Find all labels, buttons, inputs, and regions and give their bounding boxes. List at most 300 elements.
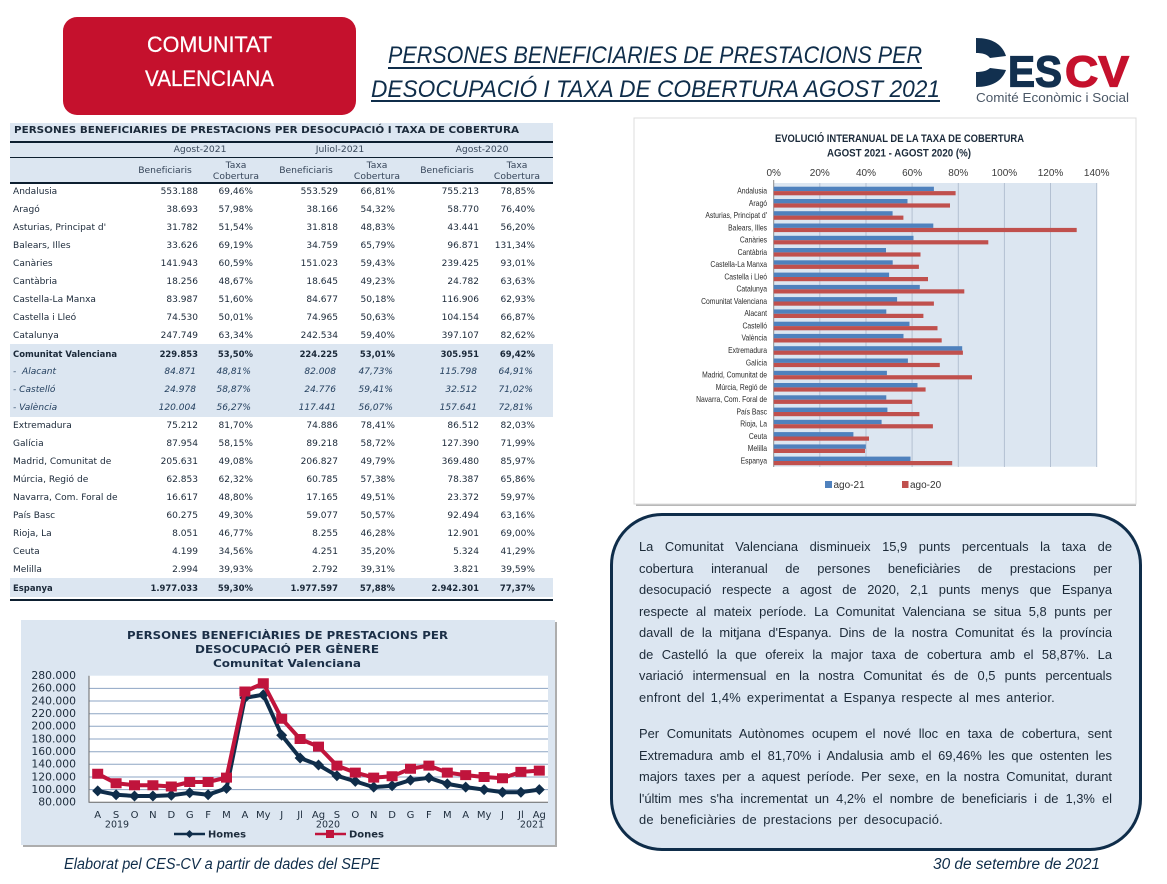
table rows: 46,28% [360,529,395,539]
series: ago-21 bars [774,187,962,461]
table rows: 49,30% [218,511,253,521]
category labels: Castelló [742,321,767,331]
y axis labels: 280.000 [31,669,76,682]
table rows: Asturias, Principat d' [13,223,106,233]
period header: Juliol-2021: Juliol-2021 [316,144,364,155]
legend: ago-20 [910,480,942,491]
table rows: Andalusia [13,187,57,197]
x axis labels: Jl [517,810,524,821]
category labels: València [741,333,768,343]
table rows: 229.853 [160,349,198,359]
table rows: 71,02% [498,385,533,395]
table rows: 50,18% [360,295,395,305]
table rows: 24.782 [447,277,479,287]
table rows: 116.906 [442,295,479,305]
table rows: 60,59% [218,259,253,269]
panel: data table [10,123,553,601]
table rows: 75.212 [166,421,198,431]
table rows: 39,93% [218,565,253,575]
text block: first paragraph [639,539,1112,704]
column header: Cobertura [354,171,400,182]
text block: second paragraph: majors taxes per a aquest període. Per sexe, en la nostra Comunitat, durant [639,769,1112,784]
table rows: 82,62% [500,331,535,341]
table rows: 63,34% [218,331,253,341]
x axis labels: M [222,810,231,821]
table rows: Madrid, Comunitat de [13,457,111,467]
table rows: Melilla [13,565,42,575]
x axis labels: F [205,810,211,821]
y axis labels: 140.000 [31,758,76,771]
top axis labels: 20% [810,168,830,179]
table rows: 59,40% [360,331,395,341]
category labels: Galícia [746,358,768,367]
x axis labels: J [500,810,504,821]
top axis labels: 140% [1084,168,1110,179]
table rows: 2.942.301 [431,583,479,593]
table rows: 56,20% [500,223,535,233]
text block: first paragraph: La Comunitat Valenciana disminueix 15,9 punts percentuals la taxa de [639,539,1112,554]
table rows: 206.827 [301,457,338,467]
table rows: 65,79% [360,241,395,251]
table rows: - València [13,403,57,413]
x axis labels: Ag [312,810,325,821]
table rows: 12.901 [447,529,479,539]
table rows: 205.631 [161,457,198,467]
table rows: 50,01% [218,313,253,323]
text block: first paragraph: respecte al mateix període. La Comunitat Valenciana se situa 5,8 punts per [639,604,1112,618]
table rows: 1.977.033 [150,583,198,593]
x axis labels: A [94,810,101,821]
column header: Cobertura [213,171,259,182]
top axis labels: 120% [1038,168,1063,179]
x axis labels: N [149,810,157,821]
table rows: 89.218 [306,439,338,449]
table rows: 62.853 [166,475,198,485]
table rows: Cantàbria [13,277,57,287]
table rows: 62,32% [218,475,253,485]
column header: Beneficiaris [420,165,474,176]
y axis labels: 80.000 [38,796,76,809]
x axis labels: J [279,810,283,821]
table rows: 18.645 [306,277,338,287]
column header [354,160,400,182]
category labels: Madrid, Comunitat de [702,370,767,380]
table rows: 58,15% [218,439,253,449]
panel: commentary text [610,513,1142,851]
category labels [696,186,768,466]
table rows: 49,23% [360,277,395,287]
table rows: 50,57% [360,511,395,521]
title [371,42,940,103]
table rows [13,187,535,593]
plot area and grid [89,676,548,802]
table rows: 2.792 [312,565,338,575]
table rows: Balears, Illes [13,241,71,251]
table rows: 86.512 [447,421,479,431]
table rows: 755.213 [442,187,479,197]
table rows: 5.324 [453,547,479,557]
x axis labels: O [351,810,359,821]
y axis labels: 160.000 [31,745,76,758]
table rows: 242.534 [301,331,338,341]
category labels: Rioja, La [740,419,768,429]
top axis labels: 100% [992,168,1017,179]
period header: Agost-2020: Agost-2020 [456,144,508,155]
x axis labels: G [186,810,194,821]
table rows: 74.886 [306,421,338,431]
table rows: 104.154 [442,313,479,323]
table rows: 66,87% [500,313,535,323]
table rows: 51,60% [218,295,253,305]
table rows: 17.165 [306,493,338,503]
legend [825,480,942,491]
table rows: 224.225 [300,349,338,359]
table rows: 58,72% [360,439,395,449]
table rows: - Castelló [13,385,55,395]
table rows: 83.987 [166,295,198,305]
table rows: 54,32% [360,205,395,215]
table rows: 74.965 [306,313,338,323]
table rows: 84.871 [164,367,196,377]
chart title: EVOLUCIÓ INTERANUAL DE LA TAXA DE COBERTURA [775,132,1024,145]
category labels: Asturias, Principat d' [705,210,768,220]
table rows: 63,16% [500,511,535,521]
table rows: Castella-La Manxa [13,295,96,305]
table rows: Castella i Lleó [13,313,76,323]
table rows: Múrcia, Regió de [13,475,88,485]
table rows: 69,46% [218,187,253,197]
column header: Cobertura [494,171,540,182]
table rows: 239.425 [442,259,479,269]
text block: first paragraph: desocupació respecte a agost de 2020, 2,1 punts menys que Espanya [639,582,1112,597]
column header: Taxa [226,160,246,171]
table rows: 157.641 [440,403,477,413]
text block: second paragraph [639,726,1112,827]
table rows: Navarra, Com. Foral de [13,493,118,503]
table rows: 32.512 [445,385,477,395]
y axis labels: 260.000 [31,682,76,695]
table rows: 58,87% [216,385,251,395]
table rows: 151.023 [301,259,338,269]
table rows: - Alacant [13,367,56,377]
table rows: 65,86% [500,475,535,485]
table rows: 47,73% [358,367,393,377]
table rows: 72,81% [498,403,533,413]
table rows: 82.008 [304,367,336,377]
table rows: 553.529 [301,187,338,197]
chart title: AGOST 2021 - AGOST 2020 (%) [827,148,971,160]
table rows: 8.051 [172,529,198,539]
top axis labels: 0% [766,168,781,179]
chart title: PERSONES BENEFICIÀRIES DE PRESTACIONS PER [127,629,448,642]
category labels: Castella-La Manxa [710,260,768,269]
text block: first paragraph: variació intermensual en la nostra Comunitat és de 0,5 punts percentuals [639,668,1112,683]
table heading: PERSONES BENEFICIARIES DE PRESTACIONS PER DESOCUPACIÓ I TAXA DE COBERTURA [14,124,520,136]
category labels: Alacant [744,309,767,318]
table rows: 57,98% [218,205,253,215]
category labels: Melilla [748,444,768,453]
table rows: 66,81% [360,187,395,197]
table rows: 48,67% [218,277,253,287]
table rows: 39,59% [500,565,535,575]
title: PERSONES BENEFICIARIES DE PRESTACIONS PER [388,42,922,69]
table rows: Ceuta [13,547,40,557]
table rows: 16.617 [166,493,198,503]
panel: region badge [63,17,356,115]
table rows: 553.188 [161,187,198,197]
chart title [127,629,448,670]
table rows: 78.387 [447,475,479,485]
x axis labels: S [113,810,119,821]
table rows: 84.677 [306,295,338,305]
column header: Taxa [507,160,527,171]
panel: region badge: COMUNITAT [147,32,272,57]
table rows: 92.494 [447,511,479,521]
series: ago-20 bars [774,191,1077,465]
y axis labels: 120.000 [31,770,76,783]
date note: 30 de setembre de 2021 [933,856,1100,873]
table rows: 81,70% [218,421,253,431]
category labels: Andalusia [737,186,768,196]
table rows: 24.776 [304,385,336,395]
source note: Elaborat pel CES-CV a partir de dades del SEPE [64,856,381,873]
table rows: 4.199 [172,547,198,557]
table rows: 117.441 [299,403,336,413]
x axis labels: A [462,810,469,821]
category labels: Comunitat Valenciana [701,296,768,306]
x axis labels: D [167,810,175,821]
table rows: 34,56% [218,547,253,557]
y axis labels [31,669,76,809]
table rows: 141.943 [161,259,198,269]
category labels: Espanya [741,456,768,466]
table rows: 305.951 [441,349,479,359]
table rows: 53,01% [360,349,395,359]
table rows: 93,01% [500,259,535,269]
icon: CES-CV logo: CV [1065,48,1130,96]
table rows: 35,20% [360,547,395,557]
table rows: 57,88% [360,583,395,593]
table rows: 87.954 [166,439,198,449]
text block: first paragraph: enfront del 1,4% experimentat a Espanya respecte al mes anterior. [639,690,1055,704]
top axis labels: 60% [902,168,922,179]
table rows: 49,51% [360,493,395,503]
y axis labels: 200.000 [31,720,76,733]
icon: CES-CV logo: ES [1008,48,1062,96]
table rows: 24.978 [164,385,196,395]
chart title: DESOCUPACIÓ PER GÈNERE [195,643,379,656]
table rows: 4.251 [312,547,338,557]
category labels: Cantàbria [738,247,768,257]
table rows: 56,07% [358,403,393,413]
table rows: 46,77% [218,529,253,539]
table rows: 74.530 [166,313,198,323]
x axis labels: N [370,810,377,821]
table rows: Comunitat Valenciana [13,349,117,359]
x axis labels: G [407,810,414,821]
legend [174,830,384,840]
category labels: Navarra, Com. Foral de [696,395,767,404]
table rows: 39,31% [360,565,395,575]
legend: ago-21 [834,480,865,491]
category labels: Canàries [740,235,767,245]
table rows: 51,54% [218,223,253,233]
x axis labels: M [443,810,452,821]
table rows: 127.390 [442,439,479,449]
table rows: 1.977.597 [290,583,338,593]
table rows: 59,43% [360,259,395,269]
icon: CES-CV logo [976,38,1130,105]
x axis labels: A [241,810,248,821]
column header: Beneficiaris [138,165,192,176]
text block: second paragraph: l'últim mes s'ha incrementat un 4,2% el nombre de beneficiaris i de 1,3% el [639,790,1112,806]
table rows: 60.785 [306,475,338,485]
chart title: Comunitat Valenciana [213,658,361,670]
table rows: 59,30% [218,583,253,593]
table rows: Aragó [13,205,40,215]
period header: Agost-2021: Agost-2021 [174,144,226,155]
table rows: 57,38% [360,475,395,485]
table rows: 50,63% [360,313,395,323]
text block: first paragraph: de Castelló la que ofereix la major taxa de cobertura amb el 58,87%. La [639,646,1112,662]
table rows: 69,00% [500,529,535,539]
table rows: 62,93% [500,295,535,305]
table rows: 43.441 [447,223,479,233]
table rows: 33.626 [166,241,198,251]
table rows: 31.782 [166,223,198,233]
category labels: Balears, Illes [728,223,767,232]
x axis labels: S [334,810,340,821]
x axis labels: 2021 [520,820,544,830]
text block: second paragraph: Extremadura amb el 81,70% i Andalusia amb el 69,46% les que ostenten les [639,748,1112,762]
table rows: 78,41% [360,421,395,431]
x axis labels: 2020 [316,820,340,830]
table rows: 64,91% [498,367,533,377]
table rows: 131,34% [495,241,535,251]
x axis labels [94,810,546,830]
table rows: 3.821 [453,565,479,575]
table rows: 8.255 [312,529,338,539]
category labels: Múrcia, Regió de [716,382,767,392]
category labels: Catalunya [736,284,768,294]
table rows: 120.004 [159,403,196,413]
table rows: 247.749 [161,331,198,341]
table rows: 41,29% [500,547,535,557]
x axis labels: F [426,810,432,821]
table rows: 49,08% [218,457,253,467]
table rows: 60.275 [166,511,198,521]
table rows: 78,85% [500,187,535,197]
table rows: 69,19% [218,241,253,251]
column header: Beneficiaris [279,165,333,176]
table rows: 69,42% [500,349,535,359]
table rows: 31.818 [306,223,338,233]
text block: first paragraph: davall de la mitjana d'Espanya. Dins de la nostra Comunitat és la província [639,625,1112,640]
table rows: 59,97% [500,493,535,503]
title: DESOCUPACIÓ I TAXA DE COBERTURA AGOST 2021 [371,76,940,103]
x axis labels: My [256,810,271,821]
series: Dones [92,678,545,792]
table rows: 53,50% [218,349,253,359]
x axis labels: 2019 [105,820,129,830]
table rows: 18.256 [166,277,198,287]
table rows: País Basc [13,511,55,521]
chart title [775,132,1024,160]
y axis labels: 240.000 [31,694,76,707]
table rows: Catalunya [13,331,59,341]
top axis labels: 40% [856,168,876,179]
column header [494,160,540,182]
table rows: Rioja, La [13,529,52,539]
y axis labels: 220.000 [31,707,76,720]
table rows: 2.994 [172,565,198,575]
table rows: 56,27% [216,403,251,413]
table rows: Canàries [13,259,53,269]
category labels: Extremadura [728,345,768,355]
table rows: 77,37% [500,583,535,593]
table rows: 23.372 [447,493,479,503]
table rows: 48,81% [216,367,251,377]
text block: first paragraph: cobertura interanual de persones beneficiàries de prestacions per [639,560,1112,576]
legend: Homes [208,830,246,840]
legend: Dones [349,830,384,840]
category labels: Aragó [749,198,767,208]
table rows: 96.871 [447,241,479,251]
table rows: 59.077 [306,511,338,521]
x axis labels: Jl [296,810,303,821]
top axis labels [766,168,1110,179]
table rows: 397.107 [442,331,479,341]
table rows: 63,63% [500,277,535,287]
table rows: 115.798 [440,367,477,377]
table rows: 38.693 [166,205,198,215]
table rows: Extremadura [13,421,72,431]
table rows: 48,80% [218,493,253,503]
y axis labels: 180.000 [31,732,76,745]
table rows: 85,97% [500,457,535,467]
column header [213,160,259,182]
text block: second paragraph: Per Comunitats Autònomes ocupem el nové lloc en taxa de cobertura, sent [639,726,1112,741]
table rows: 49,79% [360,457,395,467]
panel: region badge: VALENCIANA [145,66,274,91]
table rows: 71,99% [500,439,535,449]
category labels: País Basc [736,407,767,417]
series: Homes [92,689,545,802]
text block: second paragraph: de beneficiàries de prestacions per desocupació. [639,812,943,827]
plot background and grid [774,180,1097,467]
table rows: 76,40% [500,205,535,215]
column header: Taxa [367,160,387,171]
top axis labels: 80% [948,168,968,179]
x axis labels: Ag [533,810,546,821]
table rows: Espanya [13,583,53,593]
table rows: 369.480 [442,457,479,467]
icon: CES-CV logo: Comité Econòmic i Social [976,90,1129,105]
x axis labels: D [388,810,396,821]
table rows: 38.166 [306,205,338,215]
table rows: Galícia [13,439,44,449]
y axis labels: 100.000 [31,783,76,796]
table rows: 34.759 [306,241,338,251]
table rows: 48,83% [360,223,395,233]
table rows: 59,41% [358,385,393,395]
table rows: 58.770 [447,205,479,215]
x axis labels: O [131,810,139,821]
table rows: 82,03% [500,421,535,431]
category labels: Ceuta [749,431,768,441]
x axis labels: My [477,810,491,821]
category labels: Castella i Lleó [724,272,767,282]
